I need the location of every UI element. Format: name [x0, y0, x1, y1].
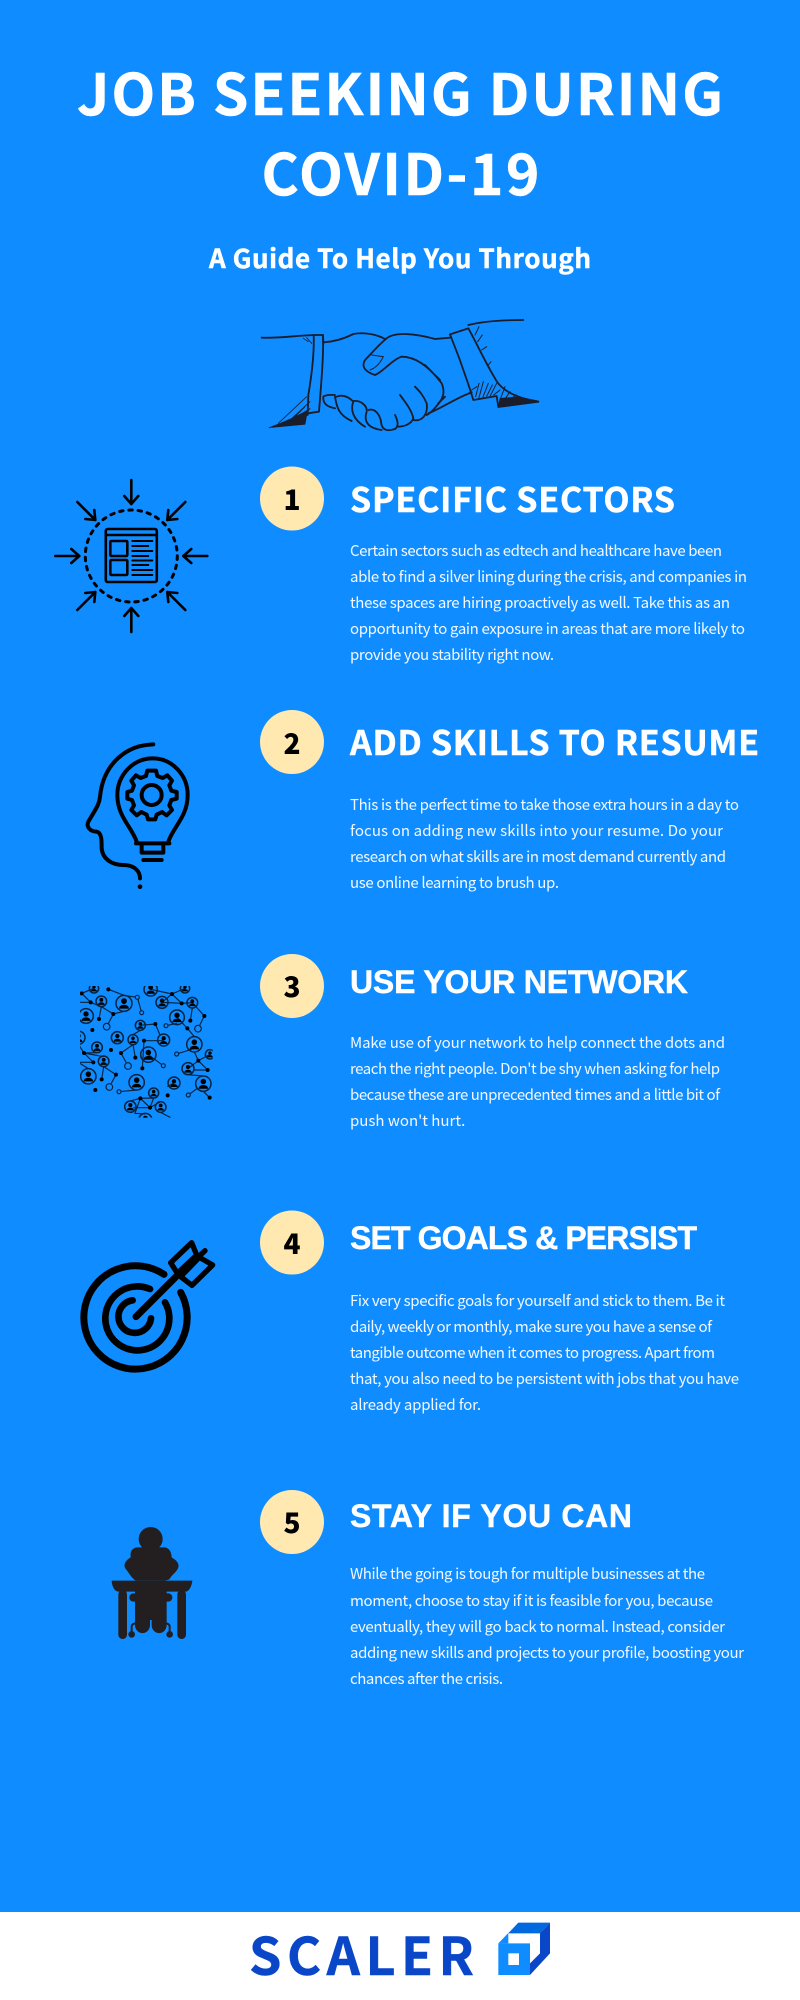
body text 2: [350, 794, 739, 893]
subtitle: A Guide To Help You Through: [208, 239, 591, 276]
body text 1: able to find a silver lining during the crisis, and companies in: [350, 566, 747, 587]
number badge 1: [260, 466, 324, 530]
number badge 3: 3: [283, 966, 301, 1006]
body text 5: moment, choose to stay if it is feasible for you, because: [350, 1590, 713, 1611]
body text 4: already applied for.: [350, 1394, 481, 1415]
section 4: goals: [84, 1210, 739, 1415]
body text 3: push won't hurt.: [350, 1110, 465, 1131]
body text 5: eventually, they will go back to normal. Instead, consider: [350, 1616, 725, 1637]
body text 3: Make use of your network to help connect the dots and: [350, 1032, 725, 1053]
body text 2: use online learning to brush up.: [350, 872, 559, 893]
number badge 3: [260, 954, 324, 1018]
title: JOB SEEKING DURING: [77, 50, 723, 132]
icon: person at desk: [112, 1527, 192, 1639]
icon: handshake: [262, 320, 538, 430]
icon: people network: [80, 986, 213, 1118]
body text 4: that, you also need to be persistent with jobs that you have: [350, 1368, 739, 1389]
icon: target with arrow: [84, 1243, 213, 1369]
number badge 5: 5: [283, 1502, 301, 1542]
body text 3: reach the right people. Don't be shy when asking for help: [350, 1058, 720, 1079]
footer: white band with logo: [0, 1912, 800, 2000]
icon: head with light bulb and gear: [88, 744, 188, 889]
heading 5: STAY IF YOU CAN: [350, 1498, 632, 1534]
heading 3: USE YOUR NETWORK: [350, 964, 688, 1000]
section 3: network: [72, 954, 725, 1131]
body text 5: [350, 1563, 744, 1689]
body text 5: chances after the crisis.: [350, 1668, 503, 1689]
body text 5: adding new skills and projects to your profile, boosting your: [350, 1642, 744, 1663]
icon: news page with inward arrows: [55, 480, 207, 632]
number badge 1: 1: [283, 479, 301, 519]
number badge 4: [260, 1210, 324, 1274]
body text 3: [350, 1032, 725, 1131]
title: COVID-19: [262, 130, 540, 212]
body text 1: opportunity to gain exposure in areas that are more likely to: [350, 618, 745, 639]
body text 1: [350, 540, 747, 665]
body text 5: While the going is tough for multiple businesses at the: [350, 1563, 705, 1584]
heading 4: SET GOALS & PERSIST: [350, 1220, 697, 1256]
number badge 2: 2: [283, 723, 301, 763]
body text 3: because these are unprecedented times and a little bit of: [350, 1084, 721, 1105]
logo icon: cube: [498, 1923, 550, 1975]
body text 1: provide you stability right now.: [350, 644, 554, 665]
body text 2: This is the perfect time to take those extra hours in a day to: [350, 794, 739, 815]
body text 1: these spaces are hiring proactively as well. Take this as an: [350, 592, 730, 613]
number badge 4: 4: [283, 1223, 301, 1263]
heading 2: ADD SKILLS TO RESUME: [349, 716, 759, 765]
number badge 5: [260, 1490, 324, 1554]
body text 2: research on what skills are in most demand currently and: [350, 846, 726, 867]
body text 1: Certain sectors such as edtech and healthcare have been: [350, 540, 722, 561]
logo wordmark: SCALER: [249, 1915, 474, 1990]
section 5: stay: [112, 1490, 744, 1689]
body text 2: focus on adding new skills into your resume. Do your: [350, 820, 723, 841]
heading 1: SPECIFIC SECTORS: [350, 473, 675, 522]
title: [77, 50, 723, 212]
body text 4: tangible outcome when it comes to progress. Apart from: [350, 1342, 715, 1363]
section 1: specific sectors: [55, 466, 747, 665]
section 2: add skills: [88, 710, 759, 893]
number badge 2: [260, 710, 324, 774]
body text 4: Fix very specific goals for yourself and stick to them. Be it: [350, 1290, 725, 1311]
body text 4: [350, 1290, 739, 1415]
body text 4: daily, weekly or monthly, make sure you have a sense of: [350, 1316, 713, 1337]
